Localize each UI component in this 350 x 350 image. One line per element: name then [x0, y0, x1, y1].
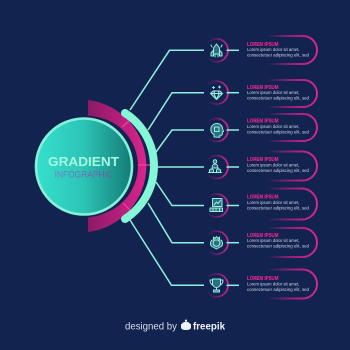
body text [247, 238, 309, 249]
icon: freepik mascot [181, 320, 191, 330]
title: LOREM IPSUM [247, 195, 278, 201]
row 2 [205, 80, 317, 107]
title: LOREM IPSUM [247, 119, 278, 125]
body text: Lorem ipsum dolor sit amet, [247, 163, 300, 168]
icon ring [205, 81, 228, 104]
icon: award badge [210, 236, 222, 249]
right connector [226, 284, 239, 286]
body text: Lorem ipsum dolor sit amet, [247, 124, 300, 129]
icon: team [208, 160, 222, 172]
circle subheading: INFOGRAPHIC [54, 170, 113, 180]
right connector [226, 129, 239, 131]
icon: trophy [210, 279, 223, 292]
footer credit [125, 320, 225, 332]
body text: consectetuer adipiscing elit, sed [247, 130, 309, 135]
title: LOREM IPSUM [247, 233, 278, 239]
body text [247, 47, 309, 57]
icon: chart board [210, 198, 222, 212]
icon ring [205, 39, 228, 62]
body text [247, 163, 309, 173]
right connector [226, 92, 239, 94]
icon ring [205, 118, 228, 142]
icon: head [211, 124, 224, 137]
icon ring [205, 194, 228, 217]
body text [247, 90, 309, 100]
row 7 [205, 269, 317, 299]
title: LOREM IPSUM [247, 42, 278, 48]
body text [247, 124, 309, 135]
row 5 [205, 188, 317, 220]
panel outline [268, 188, 317, 220]
title: LOREM IPSUM [247, 276, 278, 282]
row 1 [205, 36, 317, 64]
icon ring [205, 156, 228, 178]
row 4 [205, 151, 317, 181]
panel outline [268, 269, 317, 299]
right connector [226, 242, 239, 244]
body text [247, 282, 309, 292]
freepik text: freepik [193, 320, 225, 332]
circle heading: GRADIENT [48, 154, 119, 169]
panel outline [268, 80, 317, 107]
icon ring [205, 231, 228, 254]
right connector [226, 204, 239, 206]
icon: diamond [210, 86, 222, 100]
body text [247, 200, 309, 210]
title: LOREM IPSUM [247, 157, 278, 163]
right connector [226, 49, 239, 51]
body text: consectetuer adipiscing elit, sed [247, 287, 309, 292]
body text: Lorem ipsum dolor sit amet, [247, 238, 300, 243]
body text: consectetuer adipiscing elit, sed [247, 205, 309, 210]
row 3 [205, 114, 317, 142]
right connector [226, 166, 239, 168]
body text: Lorem ipsum dolor sit amet, [247, 47, 300, 52]
title: LOREM IPSUM [247, 85, 278, 91]
panel outline [268, 114, 317, 141]
magenta half ring [88, 100, 150, 232]
icon: rocket [211, 44, 222, 57]
body text: Lorem ipsum dolor sit amet, [247, 282, 300, 286]
icon ring [205, 274, 228, 297]
row 6 [205, 228, 317, 257]
body text: consectetuer adipiscing elit, sed [247, 168, 309, 173]
panel outline [268, 151, 317, 181]
body text: Lorem ipsum dolor sit amet, [247, 90, 300, 95]
panel outline [268, 36, 317, 64]
body text: consectetuer adipiscing elit, sed [247, 95, 309, 100]
main circle [33, 116, 135, 218]
body text: consectetuer adipiscing elit, sed [247, 244, 309, 249]
body text: consectetuer adipiscing elit, sed [247, 52, 309, 57]
body text: Lorem ipsum dolor sit amet, [247, 200, 300, 205]
panel outline [268, 228, 317, 257]
designed by text: designed by [125, 320, 178, 332]
connector lines [130, 50, 204, 285]
mint arc [125, 113, 154, 219]
